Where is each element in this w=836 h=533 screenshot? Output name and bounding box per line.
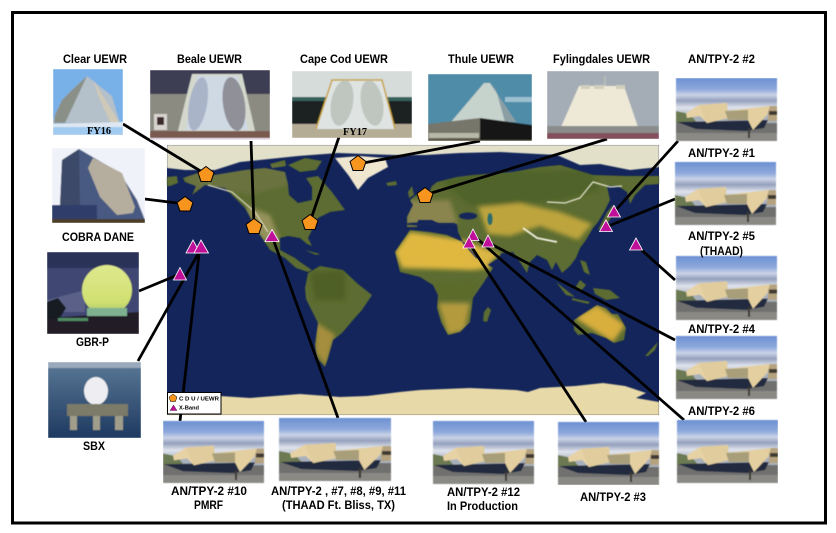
site labels: In Production	[447, 499, 518, 513]
legend: C D U / UEWR	[179, 396, 219, 402]
site labels: AN/TPY-2 #4	[688, 322, 755, 336]
photo: Clear UEWR	[53, 69, 123, 135]
site labels: Beale UEWR	[177, 52, 242, 66]
pentagon markers: UEWR sites	[177, 156, 433, 234]
site labels: AN/TPY-2 #12	[447, 485, 520, 499]
fiscal-year tags: FY17	[343, 126, 367, 138]
map: antarctica	[167, 383, 659, 415]
photo: Cobra Dane	[52, 148, 145, 223]
photo: GBR-P	[47, 252, 139, 334]
photo: Cape Cod UEWR	[292, 71, 412, 138]
site labels: AN/TPY-2 #6	[688, 404, 755, 418]
site labels: AN/TPY-2 #2	[688, 52, 755, 66]
site labels: SBX	[83, 439, 105, 453]
site labels: (THAAD)	[700, 244, 743, 258]
photo: SBX	[48, 362, 141, 438]
site labels: AN/TPY-2 #3	[580, 490, 646, 504]
legend	[168, 392, 221, 414]
site labels: GBR-P	[76, 335, 109, 349]
site labels: AN/TPY-2 #5	[688, 229, 755, 243]
map: mountain ranges	[208, 182, 622, 242]
site labels: AN/TPY-2 #1	[688, 146, 755, 160]
world map	[167, 145, 659, 415]
map: sea details	[406, 212, 492, 258]
triangle markers: X-band sites	[174, 206, 642, 280]
map: greenland	[335, 156, 388, 190]
site labels: (THAAD Ft. Bliss, TX)	[282, 498, 395, 512]
map: land masses	[166, 158, 660, 367]
map: arctic ice	[167, 145, 659, 170]
fiscal-year tags: FY16	[87, 125, 111, 137]
site labels: Fylingdales UEWR	[553, 52, 650, 66]
site labels	[62, 52, 755, 513]
site labels: AN/TPY-2 , #7, #8, #9, #11	[271, 484, 406, 498]
site labels: AN/TPY-2 #10	[171, 484, 247, 498]
site labels: Clear UEWR	[63, 52, 127, 66]
site labels: Thule UEWR	[448, 52, 514, 66]
photos: AN/TPY-2 radars	[163, 78, 778, 485]
site labels: PMRF	[194, 498, 223, 512]
photo: Thule UEWR	[428, 74, 532, 141]
photo: Fylingdales UEWR	[547, 71, 659, 139]
photo: Beale UEWR	[150, 70, 270, 140]
fiscal-year tags	[87, 125, 367, 138]
legend: X-Band	[179, 406, 199, 412]
site labels: COBRA DANE	[62, 230, 134, 244]
site labels: Cape Cod UEWR	[300, 52, 388, 66]
leader lines	[123, 124, 684, 422]
